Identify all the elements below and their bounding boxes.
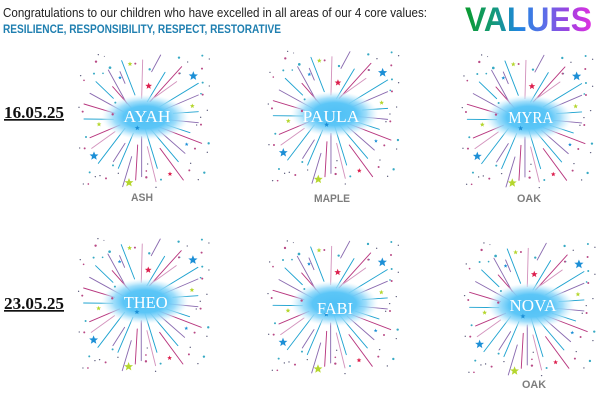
congratulations line: Congratulations to our children who have excelled in all areas of our 4 core values: [3, 6, 427, 20]
class label: OAK [517, 193, 541, 205]
class label: ASH [131, 192, 153, 204]
class label: OAK [522, 379, 546, 391]
firework: Myra [462, 54, 593, 205]
burst graphic [78, 238, 210, 372]
firework: Nova [464, 242, 596, 391]
name: NOVA [510, 296, 557, 315]
burst graphic [78, 54, 210, 188]
firework: Ayah [78, 54, 210, 204]
name: PAULA [302, 107, 360, 126]
burst graphic [462, 54, 593, 188]
name: FABI [317, 299, 353, 318]
class label: MAPLE [314, 193, 350, 205]
core values list: RESILIENCE, RESPONSIBILITY, RESPECT, RESTORATIVE [3, 22, 281, 36]
burst graphic [268, 51, 399, 185]
firework: Paula [268, 51, 399, 205]
date: 23.05.25: 23.05.25 [4, 294, 64, 313]
VALUES heading: VALUES [465, 1, 592, 39]
burst graphic [267, 240, 399, 374]
burst graphic [464, 242, 596, 376]
date: 16.05.25: 16.05.25 [4, 103, 64, 122]
firework: Fabi [267, 240, 399, 374]
intro text [3, 6, 427, 36]
name: AYAH [124, 107, 170, 126]
name: THEO [124, 293, 168, 312]
name: MYRA [508, 108, 554, 127]
firework: Theo [78, 238, 210, 372]
